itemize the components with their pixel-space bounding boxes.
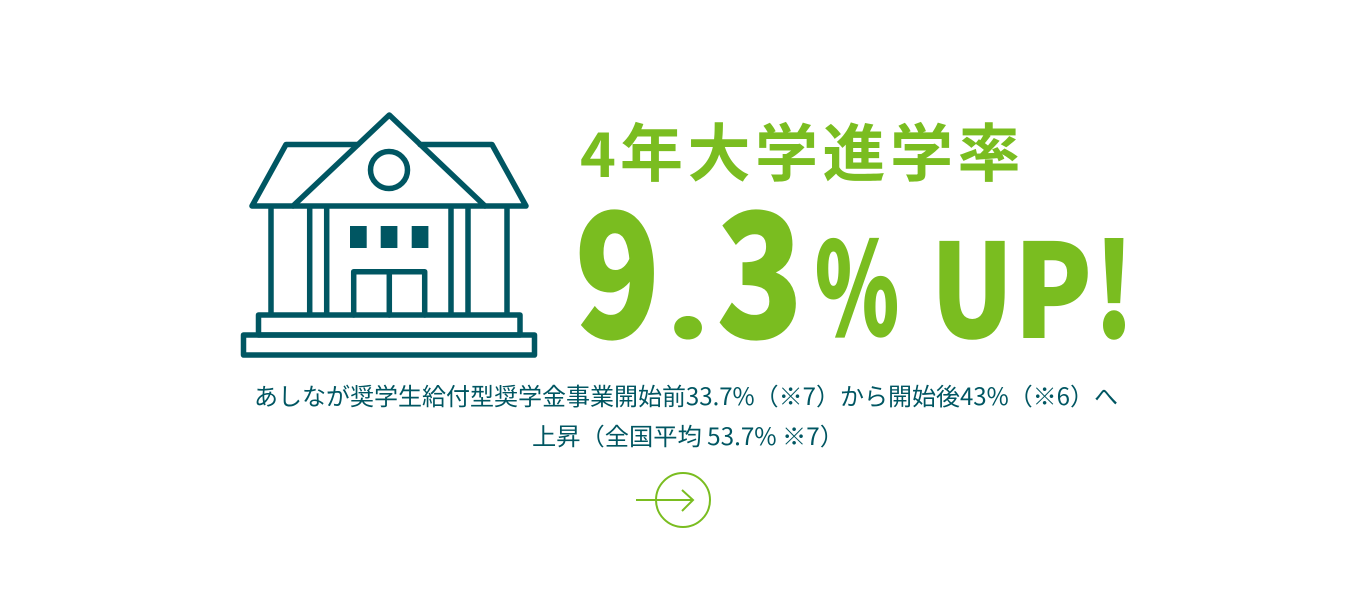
big figure: 9.3% UP!: % (815, 188, 899, 372)
description text: あしなが奨学生給付型奨学金事業開始前33.7%（※7）から開始後43%（※6）へ (254, 377, 1118, 412)
icon: circled arrow (636, 473, 710, 527)
big figure: 9.3% UP!: U (931, 188, 1013, 376)
big figure: 9.3% UP!: P (1014, 188, 1092, 376)
description text (254, 377, 1118, 452)
big figure: 9.3% UP! (575, 144, 1134, 386)
big figure: 9.3% UP!: 9 (575, 144, 660, 386)
description text: 上昇（全国平均 53.7% ※7） (532, 417, 844, 452)
icon: university building (244, 115, 534, 355)
heading: 4-year university enrollment rate: 4 (580, 108, 616, 195)
big figure: 9.3% UP!: 3 (717, 144, 803, 386)
big figure: 9.3% UP!: . (665, 215, 711, 369)
heading: 4-year university enrollment rate: 年大学進学率 (620, 104, 1025, 195)
big figure: 9.3% UP!: ! (1094, 188, 1134, 376)
